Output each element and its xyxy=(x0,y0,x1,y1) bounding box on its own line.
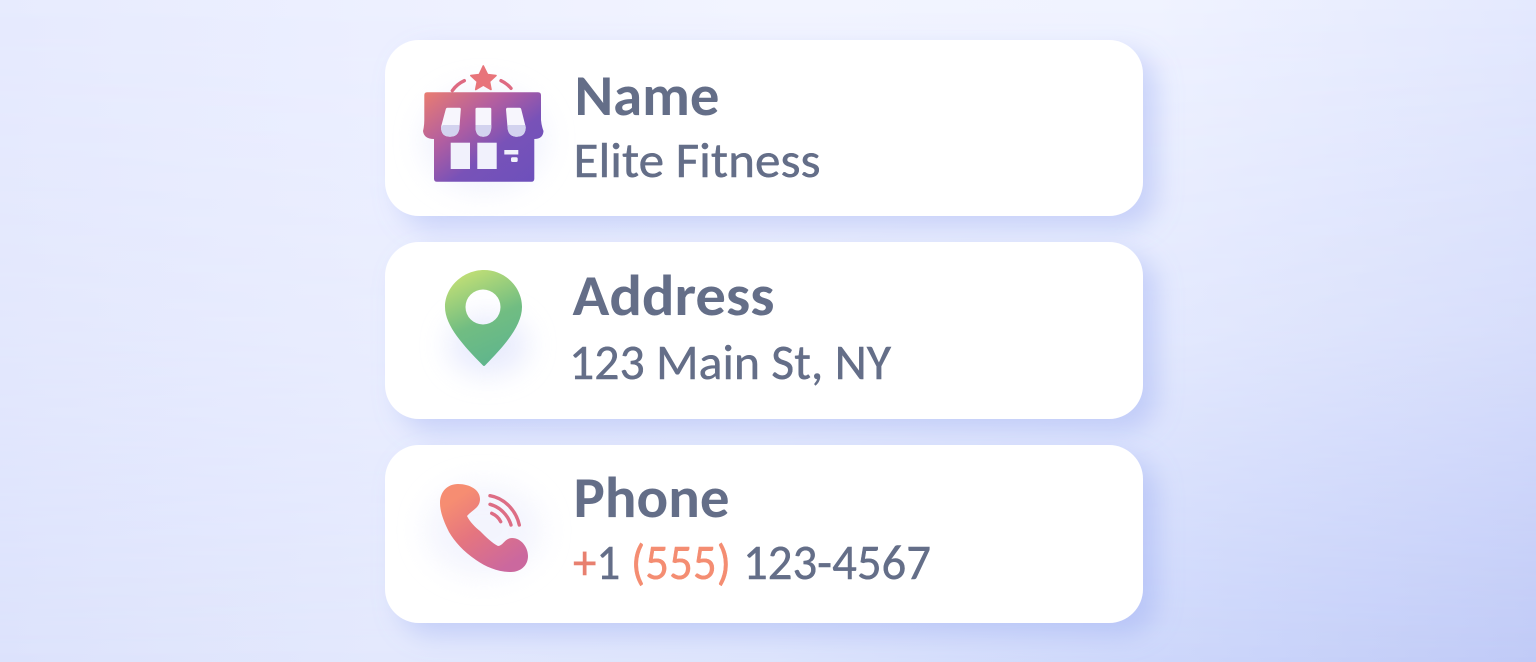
card background: address xyxy=(385,242,1143,419)
heading: Name: Name xyxy=(574,60,720,131)
icon: location pin xyxy=(445,270,528,375)
heading: Address: Address xyxy=(572,260,774,331)
card background: phone xyxy=(385,445,1143,623)
text: Elite Fitness: Elite Fitness xyxy=(574,131,820,191)
panel: phone xyxy=(385,445,1143,623)
heading: Phone: Phone xyxy=(574,462,730,533)
icon: phone handset xyxy=(426,484,542,576)
icon: storefront xyxy=(422,66,546,192)
panel: address xyxy=(385,242,1143,419)
panel: name xyxy=(385,40,1143,216)
text: phone number: +1 (555) xyxy=(573,533,731,593)
card background: name xyxy=(385,40,1143,216)
text: phone number xyxy=(573,533,931,593)
text: phone number: 123-4567 xyxy=(743,533,931,593)
text: 123 Main St, NY: 123 Main St, NY xyxy=(569,333,891,393)
